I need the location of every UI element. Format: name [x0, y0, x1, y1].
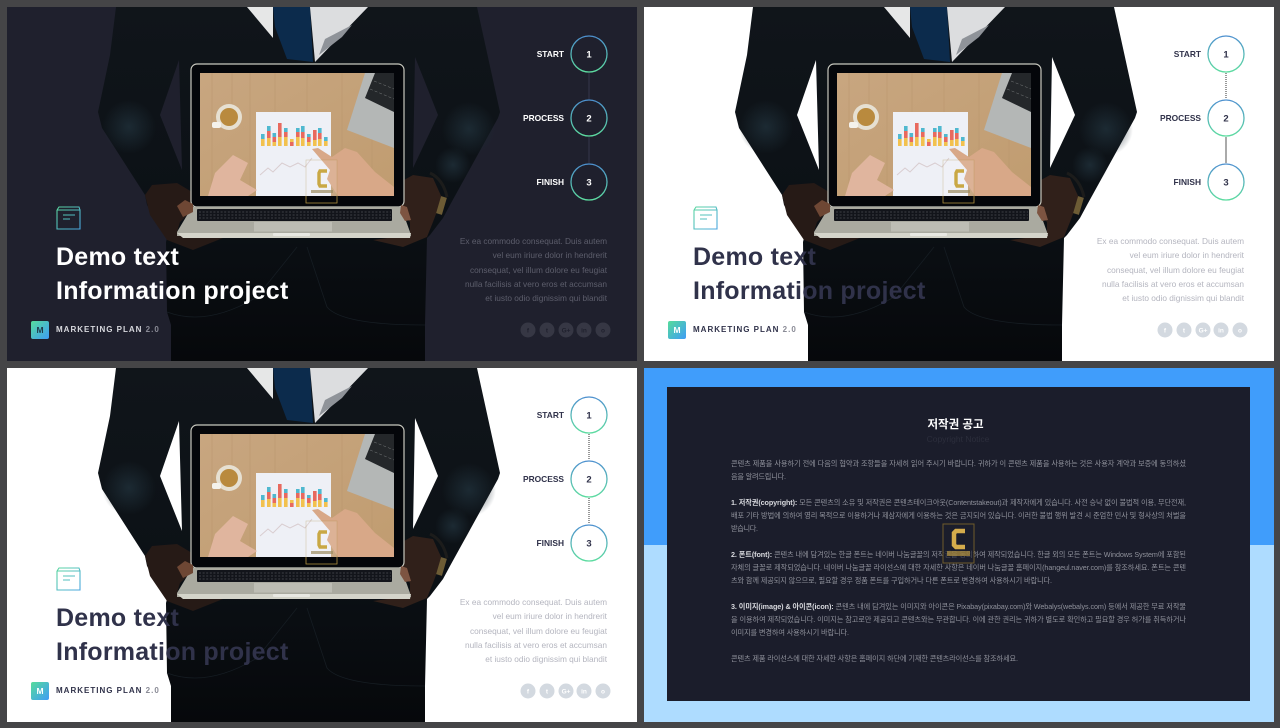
- icon: book: [56, 206, 81, 230]
- notice body text: 츠와 함께 제공되지 않으므로, 필요할 경우 정품 폰트를 구입하거나 다른 폰트로 변경하여 사용하시기 바랍니다.: [731, 576, 1052, 585]
- notice body text: 자체의 글꼴로 제작되었습니다. 네이버 나눔글꼴 라이선스에 대한 자세한 사항은 네이버 나눔글꼴 홈페이지(hangeul.naver.com)를 참조하세요. 폰트는 콘텐: [731, 563, 1186, 572]
- panel: dark cover slide: [7, 7, 637, 361]
- text block: consequat, vel illum dolore eu feugiat: [470, 626, 607, 636]
- brand: marketing plan: M: [36, 686, 44, 696]
- title: [693, 243, 926, 305]
- steps: start, process, finish: [523, 396, 608, 562]
- text block: consequat, vel illum dolore eu feugiat: [470, 264, 607, 274]
- social icons: G+: [562, 688, 571, 696]
- notice body text: 콘텐츠 제품을 사용하기 전에 다음의 협약과 조항들을 자세히 읽어 주시기 바랍니다. 귀하가 이 콘텐츠 제품을 사용하는 것은 사용자 계약과 보증에 동의하셨: [731, 459, 1186, 468]
- title: Information project: [693, 277, 926, 305]
- social icons: f: [527, 328, 530, 334]
- title: [56, 243, 289, 305]
- social icons: in: [1218, 328, 1224, 334]
- title: Demo text: [56, 604, 179, 632]
- notice body text: 음을 알려드립니다.: [731, 472, 786, 481]
- steps: start, process, finish: PROCESS: [523, 113, 564, 123]
- steps: start, process, finish: PROCESS: [523, 474, 564, 484]
- social icons: [520, 684, 610, 698]
- steps: start, process, finish: 1: [586, 410, 592, 422]
- heading: copyright notice: [927, 417, 990, 444]
- steps: start, process, finish: 1: [1223, 50, 1229, 60]
- heading: copyright notice: Copyright Notice: [927, 434, 990, 444]
- steps: start, process, finish: START: [537, 49, 565, 59]
- text block: consequat, vel illum dolore eu feugiat: [1107, 264, 1244, 274]
- brand: marketing plan: [668, 321, 797, 339]
- title: Information project: [56, 277, 289, 305]
- text block: et iusto odio dignissim qui blandit: [1122, 293, 1244, 303]
- steps: start, process, finish: FINISH: [537, 177, 564, 187]
- steps: start, process, finish: START: [537, 410, 565, 420]
- photo: businessman holding laptop: [98, 368, 500, 722]
- panel: light cover slide, top right: [644, 7, 1274, 361]
- text block: vel eum iriure dolor in hendrerit: [1130, 250, 1244, 260]
- brand: marketing plan: M: [36, 325, 44, 335]
- title: Demo text: [56, 243, 179, 271]
- notice body text: 받습니다.: [731, 524, 758, 533]
- social icons: [520, 322, 610, 338]
- brand: marketing plan: MARKETING PLAN 2.0: [56, 686, 160, 695]
- notice body text: 2. 폰트(font): 콘텐츠 내에 담겨있는 한글 폰트는 네이버 나눔글꼴의 저작권을 동의하여 제작되었습니다. 한글 외의 모든 폰트는 Windows System에 포함된: [731, 550, 1186, 559]
- text block: nulla facilisis at vero eros et accumsan: [1102, 279, 1244, 289]
- steps: start, process, finish: 2: [1223, 114, 1229, 124]
- title: [56, 604, 289, 666]
- notice body text: 을 이용하여 제작되었습니다. 이미지는 참고로만 제공되고 콘텐츠와는 무관합니다. 이에 관한 권리는 귀하가 별도로 확인하고 필요할 경우 허가를 취득하거나: [731, 615, 1186, 624]
- title: Information project: [56, 638, 289, 666]
- social icons: t: [546, 688, 549, 696]
- photo: businessman holding laptop: [735, 7, 1137, 361]
- text block: nulla facilisis at vero eros et accumsan: [465, 640, 607, 650]
- brand: marketing plan: MARKETING PLAN 2.0: [56, 325, 160, 334]
- text block: et iusto odio dignissim qui blandit: [485, 654, 607, 664]
- photo: businessman holding laptop: [98, 7, 500, 361]
- text block: vel eum iriure dolor in hendrerit: [493, 611, 607, 621]
- text block: vel eum iriure dolor in hendrerit: [493, 250, 607, 260]
- social icons: in: [581, 328, 587, 334]
- steps: start, process, finish: FINISH: [1174, 177, 1201, 187]
- steps: start, process, finish: 2: [586, 474, 592, 486]
- notice body text: 1. 저작권(copyright): 모든 콘텐츠의 소유 및 저작권은 콘텐츠테이크아웃(Contentstakeout)과 제작자에게 있습니다. 사전 승낙 없이 불법적 이용, 무단전재,: [731, 498, 1186, 507]
- steps: start, process, finish: 3: [1223, 178, 1229, 188]
- text block: [460, 236, 607, 303]
- steps: start, process, finish: START: [1174, 49, 1202, 59]
- text block: [1097, 236, 1244, 303]
- watermark: gold C badge: [943, 524, 974, 563]
- steps: start, process, finish: 3: [586, 538, 592, 550]
- social icons: f: [527, 688, 530, 696]
- text block: Ex ea commodo consequat. Duis autem: [460, 597, 607, 607]
- steps: start, process, finish: PROCESS: [1160, 113, 1201, 123]
- text block: Ex ea commodo consequat. Duis autem: [460, 236, 607, 246]
- steps: start, process, finish: 2: [586, 114, 592, 124]
- notice body text: [731, 459, 1186, 663]
- notice body text: 3. 이미지(image) & 아이콘(icon): 콘텐츠 내에 담겨있는 이미지와 아이콘은 Pixabay(pixabay.com)와 Webalys(webalys.com) 등에서 제공한 무료 저작물: [731, 602, 1186, 611]
- brand: marketing plan: M: [673, 325, 681, 335]
- steps: start, process, finish: [1160, 35, 1245, 201]
- title: Demo text: [693, 243, 816, 271]
- social icons: [1158, 322, 1248, 338]
- panel: light cover slide, bottom left: [7, 368, 637, 722]
- social icons: G+: [562, 328, 571, 334]
- icon: book: [56, 568, 81, 590]
- brand: marketing plan: MARKETING PLAN 2.0: [693, 325, 797, 334]
- notice body text: 이미지를 변경하여 사용하시기 바랍니다.: [731, 628, 849, 637]
- social icons: t: [546, 328, 549, 334]
- social icons: in: [581, 688, 587, 696]
- social icons: o: [601, 328, 605, 334]
- social icons: f: [1164, 328, 1167, 334]
- notice body text: 콘텐츠 제품 라이선스에 대한 자세한 사항은 홈페이지 하단에 기재한 콘텐츠라이선스를 참조하세요.: [731, 654, 1018, 663]
- text block: et iusto odio dignissim qui blandit: [485, 293, 607, 303]
- heading: copyright notice: 저작권 공고: [927, 417, 984, 431]
- steps: start, process, finish: 3: [586, 178, 592, 188]
- text block: Ex ea commodo consequat. Duis autem: [1097, 236, 1244, 246]
- icon: book: [693, 206, 718, 230]
- social icons: o: [601, 688, 605, 696]
- steps: start, process, finish: 1: [586, 50, 592, 60]
- social icons: t: [1183, 328, 1186, 334]
- notice body text: 배포 기타 방법에 의하여 영리 목적으로 이용하거나 제삼자에게 이용하는 것은 금지되어 있습니다. 이러한 불법 행위 발견 시 준엄한 민사 및 형사상의 처벌을: [731, 511, 1186, 520]
- text block: [460, 597, 607, 664]
- brand: marketing plan: [31, 321, 160, 339]
- social icons: G+: [1199, 328, 1208, 334]
- social icons: o: [1238, 328, 1242, 334]
- steps: start, process, finish: FINISH: [537, 538, 564, 548]
- brand: marketing plan: [31, 682, 160, 700]
- steps: start, process, finish: [523, 35, 608, 201]
- panel: copyright notice slide: [644, 368, 1274, 722]
- text block: nulla facilisis at vero eros et accumsan: [465, 279, 607, 289]
